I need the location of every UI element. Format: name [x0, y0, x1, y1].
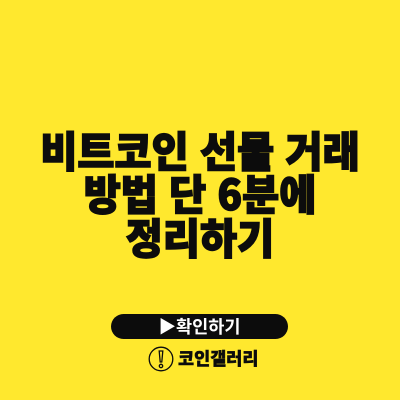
- title: [40, 119, 360, 267]
- confirm button: [111, 314, 288, 339]
- title: 비트코인 선물 거래: [40, 119, 360, 180]
- icon: exclamation circle: [148, 346, 174, 372]
- title: 방법 단 6분에: [84, 162, 316, 223]
- button label: ▶확인하기: [159, 314, 240, 339]
- brand name: 코인갤러리: [178, 346, 258, 371]
- brand logo: [148, 346, 258, 372]
- title: 정리하기: [126, 206, 274, 267]
